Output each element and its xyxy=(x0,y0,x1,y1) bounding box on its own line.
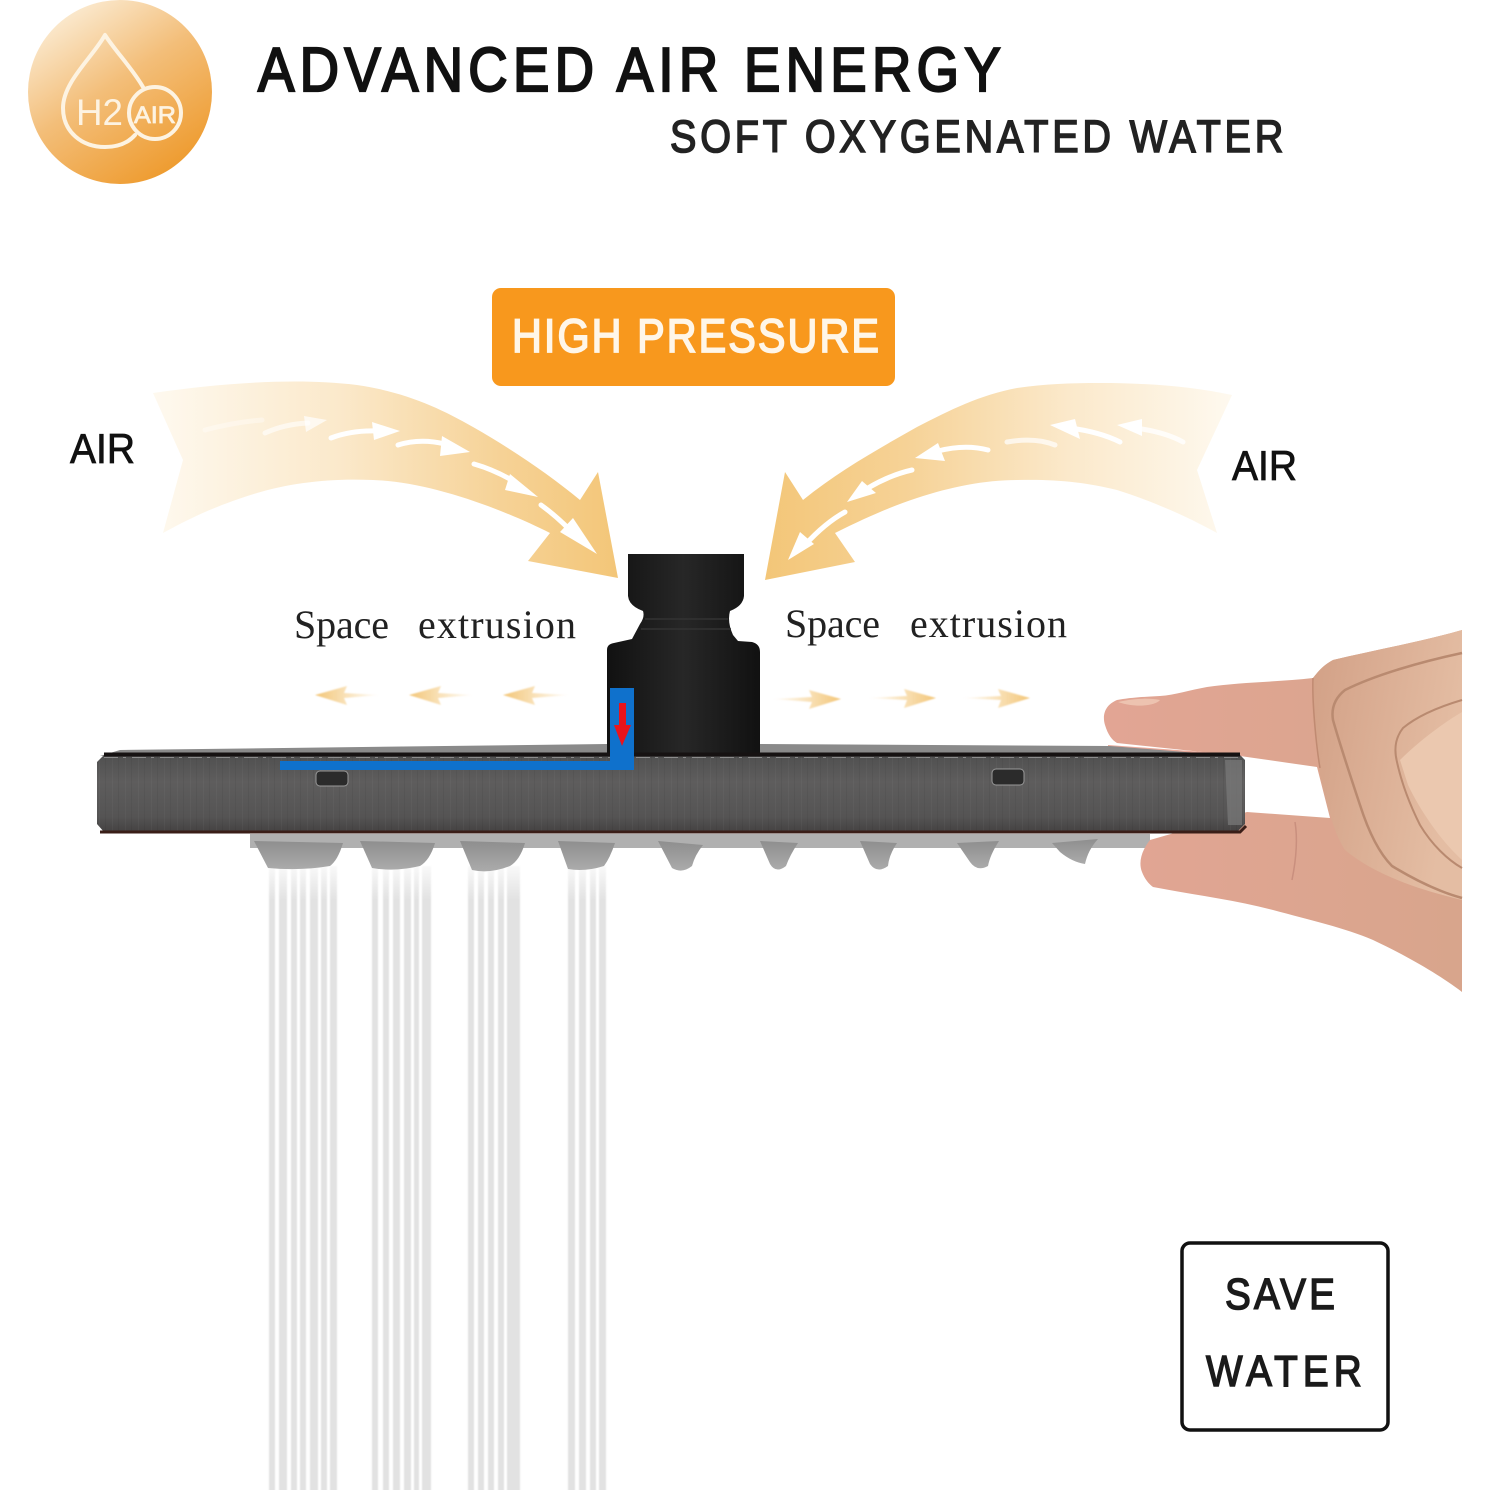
arrow: air flow left xyxy=(153,382,618,578)
subtitle: SOFT OXYGENATED WATER xyxy=(670,112,1283,162)
shower head: flat plate xyxy=(97,744,1246,832)
label: space extrusion right: Space xyxy=(785,601,880,646)
label: space extrusion left: Space xyxy=(294,602,389,647)
label: space extrusion right xyxy=(785,601,1067,646)
nozzles xyxy=(254,839,1098,871)
arrows: small right-pointing air arrows xyxy=(772,689,1030,709)
stream 3 xyxy=(468,866,520,1490)
icon: H2 AIR logo badge: H2 xyxy=(76,92,123,133)
stream 1 xyxy=(269,866,337,1490)
stream 4 xyxy=(568,866,606,1490)
label: space extrusion right: extrusion xyxy=(910,601,1067,646)
slot left xyxy=(316,771,348,786)
hand: fingers and palm xyxy=(1104,630,1462,992)
box: save water: SAVE xyxy=(1225,1269,1335,1319)
stream 2 xyxy=(372,866,431,1490)
label: space extrusion left: extrusion xyxy=(418,602,576,647)
box: save water: WATER xyxy=(1206,1346,1362,1396)
arrow: air flow right xyxy=(765,383,1232,580)
icon: H2 AIR logo badge: AIR xyxy=(134,102,176,129)
label: air left: AIR xyxy=(70,425,135,472)
badge: high pressure: HIGH PRESSURE xyxy=(512,311,879,363)
box: save water xyxy=(1182,1243,1388,1430)
badge: high pressure xyxy=(492,288,895,386)
label: air right: AIR xyxy=(1232,442,1297,489)
arrows: small left-pointing air arrows xyxy=(315,686,570,705)
water streams xyxy=(269,866,606,1490)
diagram: blue water channel xyxy=(280,688,634,770)
slot right xyxy=(992,769,1024,785)
arrow: red water direction xyxy=(614,703,631,746)
label: space extrusion left xyxy=(294,602,576,647)
title: ADVANCED AIR ENERGY xyxy=(258,36,1001,105)
shower head: connector xyxy=(607,554,760,753)
shower face underside xyxy=(250,834,1150,848)
icon: H2 AIR logo badge xyxy=(28,0,212,184)
